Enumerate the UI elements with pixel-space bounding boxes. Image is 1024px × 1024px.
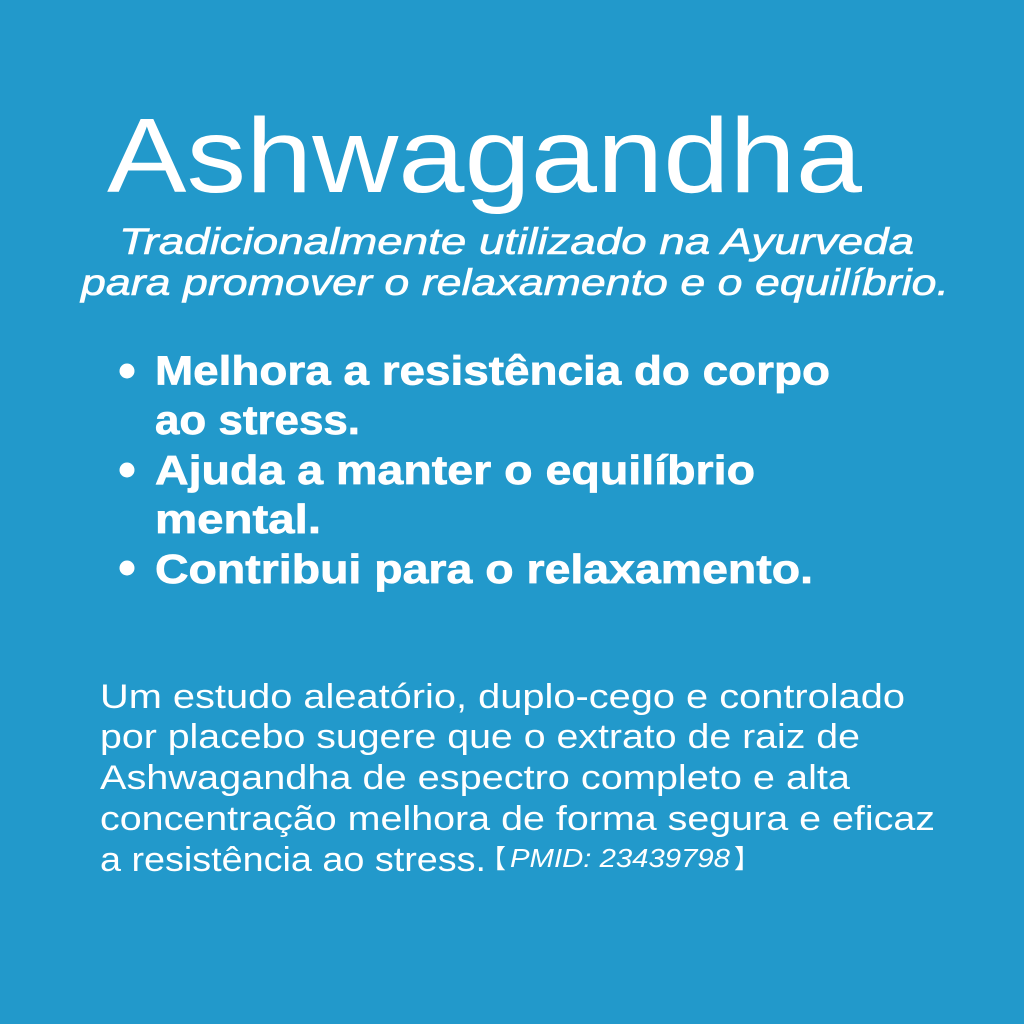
bullet: stress resistance: Melhora a resistência do corpo: [155, 348, 830, 394]
bullet: relaxation: Contribui para o relaxamento.: [155, 546, 813, 592]
subtitle: para promover o relaxamento e o equilíbrio.: [80, 262, 949, 303]
subtitle: Tradicionalmente utilizado na Ayurveda: [119, 221, 914, 262]
bullet: mental balance: mental.: [155, 496, 321, 542]
bullet: mental balance: [120, 447, 755, 542]
bullet: mental balance: Ajuda a manter o equilíbrio: [155, 447, 755, 493]
study paragraph: a resistência ao stress.: [100, 841, 486, 879]
study paragraph: [100, 678, 935, 879]
study paragraph: concentração melhora de forma segura e eficaz: [100, 800, 935, 838]
study paragraph: Ashwagandha de espectro completo e alta: [100, 759, 850, 797]
study paragraph: por placebo sugere que o extrato de raiz de: [100, 718, 860, 756]
citation: 】: [734, 844, 760, 874]
title: Ashwagandha: [107, 97, 862, 215]
study paragraph: Um estudo aleatório, duplo-cego e controlado: [100, 678, 905, 716]
citation: [480, 843, 760, 874]
citation: PMID: 23439798: [510, 843, 731, 873]
benefits list: [120, 348, 830, 592]
subtitle: [80, 221, 949, 303]
citation: 【: [480, 844, 506, 874]
bullet: stress resistance: [120, 348, 830, 443]
bullet: stress resistance: ao stress.: [155, 397, 360, 443]
